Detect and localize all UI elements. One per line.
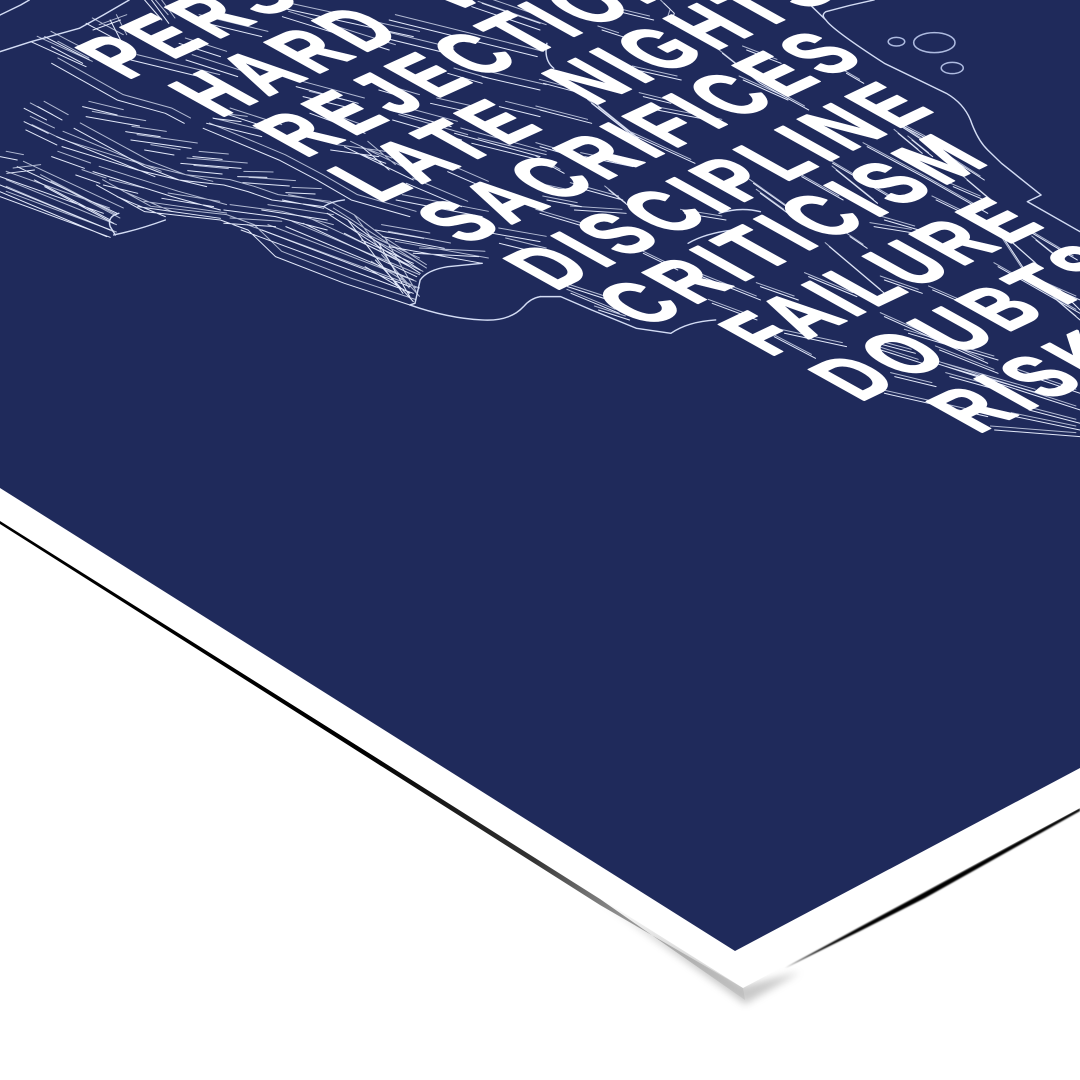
word: sacrifices: SACRIFICES bbox=[394, 17, 889, 255]
iceberg line illustration bbox=[0, 0, 1080, 437]
page shadow: soft grey under corner bbox=[0, 520, 1080, 1004]
iceberg left hatching bbox=[0, 0, 546, 320]
word: discipline: DISCIPLINE bbox=[483, 68, 959, 301]
word: failure: FAILURE bbox=[698, 184, 1068, 367]
air bubbles bbox=[888, 33, 963, 74]
iceberg right hatching and outline bbox=[536, 0, 1080, 437]
word stack on iceberg bbox=[55, 0, 1080, 444]
word: criticism: CRITICISM bbox=[574, 120, 1014, 338]
